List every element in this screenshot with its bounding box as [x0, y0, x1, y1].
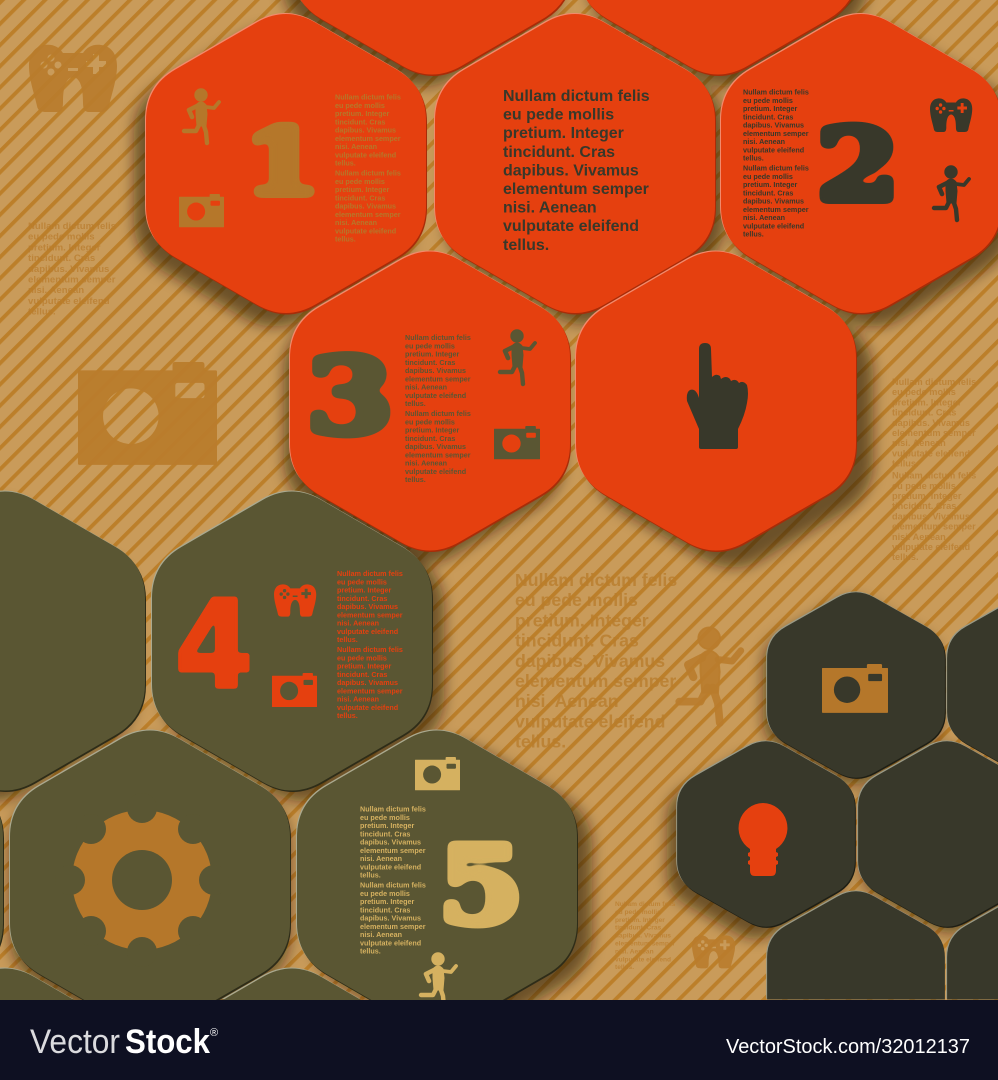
text block: tellus. [337, 635, 358, 644]
text block: nisi. Aenean [335, 142, 377, 151]
faded text block: right: dapibus. Vivamus [892, 511, 970, 521]
footer bar [0, 1000, 998, 1080]
icon: runner [421, 953, 456, 1007]
faded icon: small gamepad [692, 935, 735, 968]
text block: tincidunt. Cras [405, 358, 455, 367]
text block: tellus. [743, 230, 764, 238]
text block: vulputate eleifend [337, 703, 398, 712]
text block: tellus. [337, 711, 358, 720]
panel: red hexagon step 1 [145, 13, 427, 314]
text block: eu pede mollis [360, 889, 410, 898]
faded text block: left: eu pede mollis [28, 232, 95, 243]
icon: runner [184, 89, 219, 143]
text block: Nullam dictum felis [405, 333, 471, 342]
faded text block: bottom small: dapibus. Vivamus [615, 933, 671, 940]
text block: vulputate eleifend [743, 221, 804, 230]
faded text block: right: Nullam dictum felis [892, 377, 976, 387]
faded text block: centre large: pretium. Integer [515, 610, 649, 630]
text block: eu pede mollis [503, 107, 614, 124]
text block: eu pede mollis [405, 417, 455, 426]
panel: olive hexagon bottom-centre partial [222, 968, 361, 1000]
text block: tellus. [360, 870, 381, 880]
text block: elementum semper [360, 922, 426, 931]
text block: elementum semper [337, 686, 403, 695]
icon: pointing hand [687, 343, 748, 449]
faded text block: right: pretium. Integer [892, 491, 962, 501]
panel: olive hexagon gear [9, 730, 291, 1031]
faded text block: bottom small: tellus. [615, 964, 634, 971]
number 1: 1 [243, 109, 321, 216]
text block: tellus. [405, 399, 426, 408]
text block: Nullam dictum felis [503, 88, 650, 105]
text block: vulputate eleifend [360, 862, 421, 871]
text block: Nullam dictum felis [337, 569, 403, 578]
text block: pretium. Integer [743, 180, 798, 189]
faded text block: centre large: Nullam dictum felis [515, 570, 677, 590]
icon: camera [415, 757, 460, 790]
text block: tellus. [335, 234, 356, 244]
text block: elementum semper [743, 129, 809, 138]
text block: elementum semper [405, 374, 471, 383]
panel: red hexagon top partial right [577, 0, 859, 76]
text block: tincidunt. Cras [503, 144, 615, 161]
icon: camera [272, 673, 317, 707]
faded text block: right: elementum semper [892, 428, 976, 438]
text block: vulputate eleifend [335, 226, 396, 235]
faded text block: right: tincidunt. Cras [892, 408, 956, 418]
icon: gear [55, 793, 229, 967]
faded text block: centre large: eu pede mollis [515, 590, 638, 610]
text block: nisi. Aenean [337, 618, 379, 628]
faded text block: bottom small: eu pede mollis [615, 909, 661, 916]
number 2: 2 [816, 107, 900, 224]
faded text block: right: vulputate eleifend [892, 542, 970, 552]
icon: runner [934, 166, 969, 220]
text block: tellus. [743, 154, 764, 162]
text block: tellus. [503, 237, 549, 254]
text block: tincidunt. Cras [360, 829, 410, 838]
text block: eu pede mollis [335, 177, 385, 186]
faded text block: centre large: tincidunt. Cras [515, 631, 639, 651]
panel: olive hexagon left blank [0, 490, 146, 792]
faded text block: bottom small: nisi. Aenean [615, 948, 654, 955]
text block: nisi. Aenean [335, 218, 377, 227]
text block: tincidunt. Cras [337, 670, 387, 679]
panel: dark hexagon bottom [766, 890, 945, 1000]
icon: gamepad [274, 584, 316, 617]
faded text block: left: tincidunt. Cras [28, 253, 95, 264]
icon: camera [494, 426, 540, 459]
text block: eu pede mollis [743, 172, 793, 181]
faded text block: centre large: dapibus. Vivamus [515, 651, 665, 671]
text block: Nullam dictum felis [743, 88, 809, 96]
panel: dark hexagon top right partial [946, 591, 998, 779]
faded text block: left: elementum semper [28, 274, 116, 286]
footer logo text: Stock [125, 1023, 210, 1061]
text block: elementum semper [335, 134, 401, 143]
text block: pretium. Integer [337, 586, 392, 594]
faded text block: right: eu pede mollis [892, 481, 956, 491]
text block: eu pede mollis [743, 96, 793, 105]
text block: nisi. Aenean [405, 382, 447, 392]
faded text block: left: tellus. [28, 307, 56, 318]
faded text block: centre large: nisi. Aenean [515, 691, 619, 711]
number 5: 5 [438, 823, 524, 949]
faded text block: right: tellus. [892, 459, 919, 469]
text block: pretium. Integer [405, 350, 460, 358]
faded text block: centre large: vulputate eleifend [515, 711, 665, 731]
text block: Nullam dictum felis [405, 409, 471, 418]
faded text block: centre large: tellus. [515, 732, 566, 752]
number 3: 3 [306, 335, 394, 458]
text block: nisi. Aenean [743, 137, 785, 146]
text block: tellus. [405, 475, 426, 484]
faded text block: left: dapibus. Vivamus [28, 264, 109, 275]
text block: Nullam dictum felis [335, 92, 401, 102]
text block: pretium. Integer [335, 109, 390, 118]
number 4: 4 [175, 574, 253, 716]
icon: camera [179, 194, 224, 227]
text block: eu pede mollis [335, 101, 385, 110]
faded text block: right: tellus. [892, 552, 919, 562]
text block: vulputate eleifend [337, 627, 398, 636]
icon: runner [500, 330, 535, 384]
panel: dark hexagon bulb [676, 740, 856, 928]
faded text block: right: dapibus. Vivamus [892, 418, 970, 428]
text block: nisi. Aenean [360, 854, 402, 863]
footer image id: VectorStock.com/32012137 [726, 1036, 970, 1058]
faded text block: centre large: elementum semper [515, 671, 676, 691]
text block: Nullam dictum felis [743, 164, 809, 172]
text block: elementum semper [335, 210, 401, 219]
faded text block: bottom small: Nullam dictum felis [615, 901, 676, 908]
text block: vulputate eleifend [743, 145, 804, 154]
text block: nisi. Aenean [503, 200, 597, 217]
text block: Nullam dictum felis [360, 880, 426, 890]
panel: olive hexagon bottom-left partial [0, 968, 74, 1000]
faded text block: left: vulputate eleifend [28, 296, 110, 307]
faded text block: right: pretium. Integer [892, 397, 962, 407]
text block: dapibus. Vivamus [405, 442, 466, 451]
panel: olive hexagon step 4 [151, 490, 433, 792]
text block: tincidunt. Cras [743, 112, 793, 121]
text block: dapibus. Vivamus [360, 838, 421, 846]
registered mark: ® [210, 1027, 218, 1039]
panel: red hexagon step 3 [289, 250, 571, 552]
faded text block: right: nisi. Aenean [892, 532, 946, 542]
faded text block: right: eu pede mollis [892, 387, 956, 397]
text block: pretium. Integer [360, 821, 415, 830]
text block: dapibus. Vivamus [743, 196, 804, 206]
text block: eu pede mollis [360, 813, 410, 822]
text block: eu pede mollis [337, 577, 387, 586]
text block: pretium. Integer [405, 426, 460, 434]
panel: red hexagon centre text [434, 13, 716, 314]
panel: red hexagon step 2 [720, 13, 998, 314]
text block: tincidunt. Cras [405, 434, 455, 443]
text block: pretium. Integer [360, 897, 415, 906]
text block: dapibus. Vivamus [335, 202, 396, 210]
text block: nisi. Aenean [743, 213, 785, 222]
panel: dark hexagon camera [766, 591, 946, 779]
text block: eu pede mollis [337, 653, 387, 662]
panel: red hexagon top partial left [291, 0, 573, 76]
faded text block: right: Nullam dictum felis [892, 471, 976, 481]
panel: olive hexagon far-left sliver [0, 730, 4, 1031]
panel: olive hexagon step 5 [296, 730, 578, 1031]
panel: dark hexagon bottom right partial [946, 890, 998, 1000]
text block: pretium. Integer [337, 662, 392, 670]
faded text block: bottom small: vulputate eleifend [615, 956, 671, 963]
text block: dapibus. Vivamus [743, 120, 804, 130]
faded text block: bottom small: tincidunt. Cras [615, 925, 661, 932]
text block: elementum semper [360, 846, 426, 855]
text block: tellus. [335, 158, 356, 168]
text block: tincidunt. Cras [337, 594, 387, 603]
text block: tincidunt. Cras [360, 905, 410, 914]
faded text block: left: nisi. Aenean [28, 285, 84, 296]
text block: Nullam dictum felis [360, 804, 426, 814]
faded icon: camera left [78, 362, 217, 465]
text block: nisi. Aenean [405, 458, 447, 468]
text block: elementum semper [743, 205, 809, 214]
text block: nisi. Aenean [337, 694, 379, 704]
faded text block: right: vulputate eleifend [892, 448, 970, 458]
panel: red hexagon hand [575, 250, 857, 552]
faded text block: right: elementum semper [892, 522, 976, 532]
text block: tincidunt. Cras [335, 117, 385, 126]
text block: vulputate eleifend [335, 150, 396, 159]
footer logo text: Vector [30, 1023, 120, 1061]
icon: light bulb [739, 803, 787, 876]
faded text block: bottom small: elementum semper [615, 940, 676, 948]
faded text block: left: Nullam dictum felis [28, 221, 116, 232]
text block: dapibus. Vivamus [405, 366, 466, 375]
text block: vulputate eleifend [405, 467, 466, 476]
faded text block: right: tincidunt. Cras [892, 501, 956, 511]
text block: dapibus. Vivamus [335, 126, 396, 134]
faded icon: runner [679, 627, 741, 723]
text block: vulputate eleifend [405, 391, 466, 400]
text block: eu pede mollis [405, 341, 455, 350]
text block: tincidunt. Cras [743, 188, 793, 197]
text block: dapibus. Vivamus [360, 914, 421, 922]
text block: elementum semper [337, 610, 403, 619]
text block: nisi. Aenean [360, 930, 402, 939]
text block: Nullam dictum felis [337, 645, 403, 654]
text block: vulputate eleifend [360, 938, 421, 947]
text block: elementum semper [405, 450, 471, 459]
text block: dapibus. Vivamus [337, 602, 398, 611]
faded text block: right: nisi. Aenean [892, 438, 946, 448]
faded icon: gamepad top left [29, 45, 117, 112]
text block: pretium. Integer [335, 185, 390, 194]
text block: Nullam dictum felis [335, 168, 401, 178]
text block: dapibus. Vivamus [503, 162, 639, 179]
text block: tellus. [360, 946, 381, 956]
text block: pretium. Integer [743, 104, 798, 113]
text block: vulputate eleifend [503, 218, 639, 235]
faded text block: left: pretium. Integer [28, 242, 101, 253]
text block: tincidunt. Cras [335, 193, 385, 202]
faded text block: bottom small: pretium. Integer [615, 917, 665, 924]
icon: gamepad [930, 98, 972, 132]
text block: elementum semper [503, 181, 649, 198]
icon: camera [822, 664, 888, 713]
panel: dark hexagon middle right [857, 740, 998, 928]
text block: pretium. Integer [503, 125, 624, 142]
text block: dapibus. Vivamus [337, 678, 398, 687]
